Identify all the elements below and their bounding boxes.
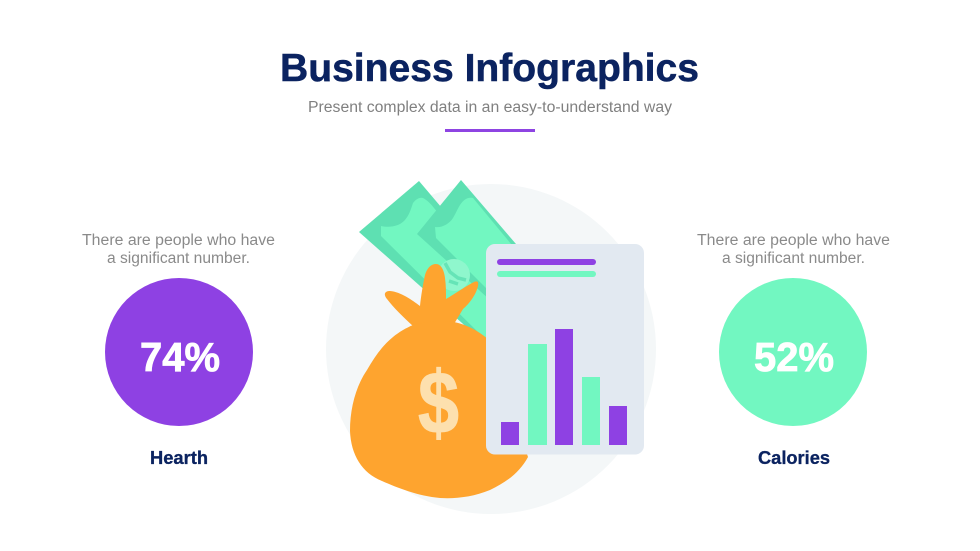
- left stat circle: [105, 278, 253, 426]
- bag body: [350, 321, 528, 498]
- dollar sign: $: [418, 353, 459, 452]
- left description: There are people who have: [82, 232, 275, 249]
- right stat value: 52%: [754, 334, 834, 380]
- illustration: money bag and report: [326, 180, 656, 514]
- bar chart: [501, 329, 627, 445]
- icon: front banknote: [417, 180, 516, 300]
- icon: back banknote: [359, 181, 520, 346]
- bag knot: [385, 264, 478, 326]
- left stat label: Hearth: [150, 448, 208, 468]
- title underline: [445, 129, 535, 132]
- left description: [82, 232, 275, 267]
- panel: left stat: [82, 232, 275, 468]
- right stat circle: [719, 278, 867, 426]
- left description: a significant number.: [107, 250, 250, 267]
- report heading lines: [497, 259, 596, 277]
- right description: There are people who have: [697, 232, 890, 249]
- icon: money bag: [350, 264, 528, 498]
- title: Business Infographics: [280, 47, 699, 90]
- panel: report card: [486, 244, 644, 454]
- subtitle: Present complex data in an easy-to-understand way: [308, 99, 672, 116]
- banknote seal marks: [445, 263, 466, 284]
- panel: right stat: [697, 232, 890, 468]
- right description: [697, 232, 890, 267]
- right stat label: Calories: [758, 448, 830, 468]
- banknote seal: [438, 259, 470, 291]
- background circle: [326, 184, 656, 514]
- left stat value: 74%: [140, 334, 220, 380]
- right description: a significant number.: [722, 250, 865, 267]
